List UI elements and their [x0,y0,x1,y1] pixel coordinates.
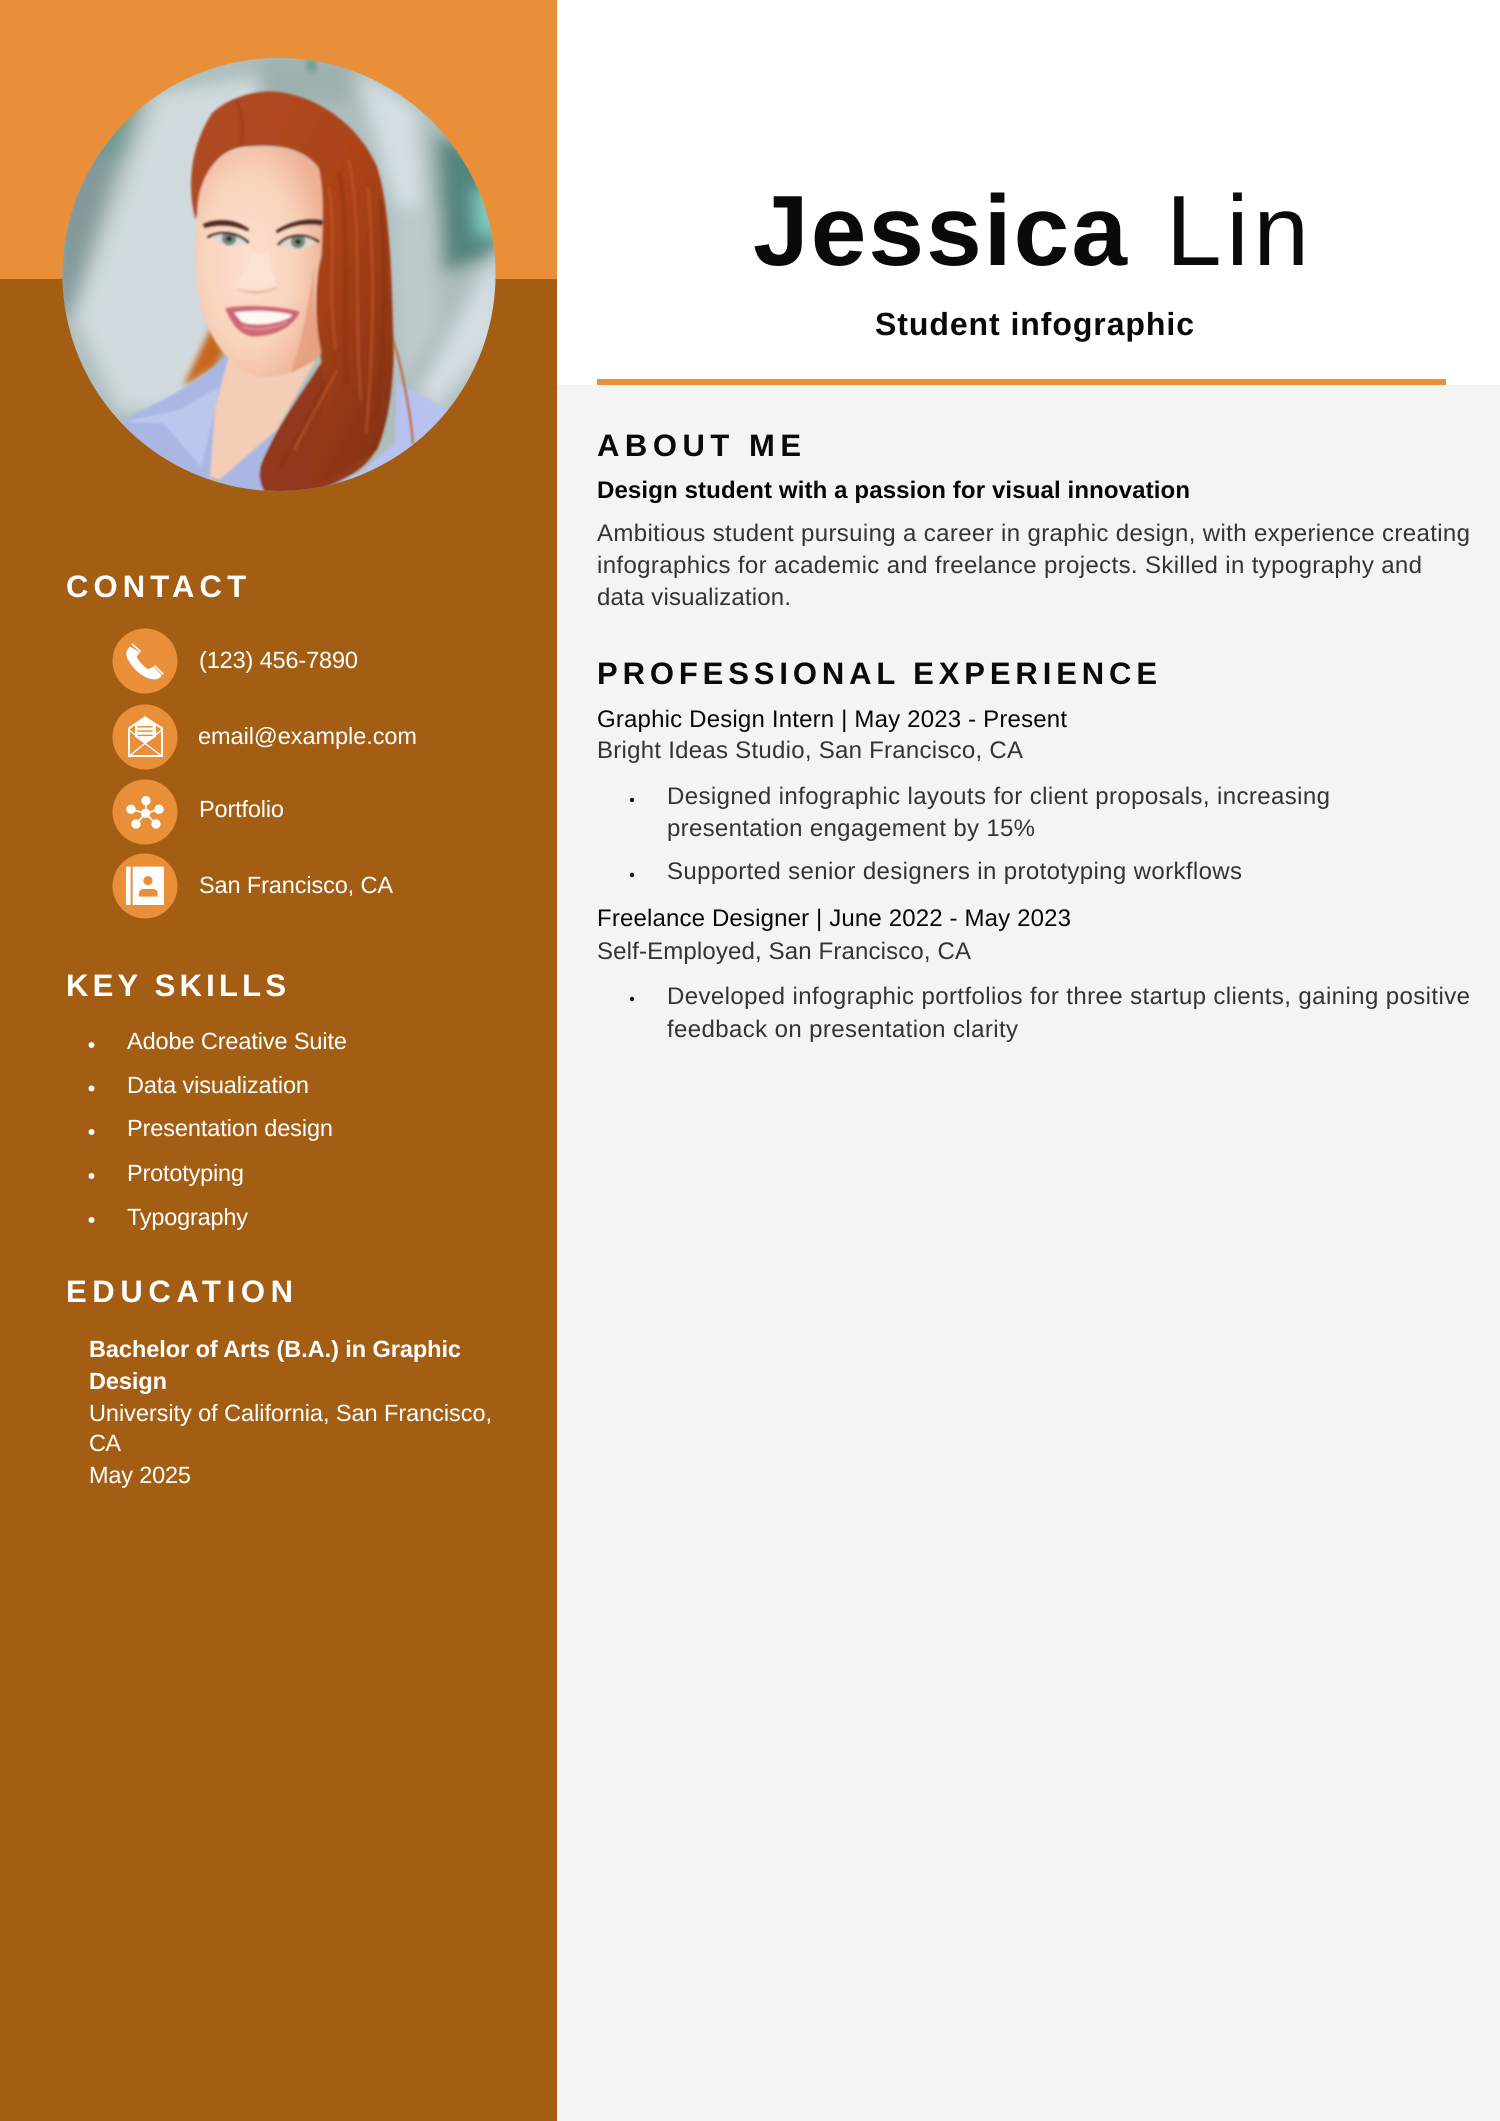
heading: professional experience: PROFESSIONAL EXPERIENCE [597,656,1157,691]
portrait photo [54,55,506,497]
job 1: Graphic Design Intern | May 2023 - Present [597,706,1067,733]
degree details: May 2025 [89,1462,191,1488]
about me tagline: Design student with a passion for visual innovation [597,477,1190,504]
panel: page background [557,0,1500,2121]
heading: about me: ABOUT ME [597,428,801,463]
job 1: Supported senior designers in prototyping workflows [667,858,1242,885]
heading: contact: CONTACT [66,569,246,604]
job 1: presentation engagement by 15% [667,815,1035,842]
contact: location: San Francisco, CA [199,872,393,898]
degree details: Bachelor of Arts (B.A.) in Graphic [89,1336,461,1362]
subtitle: Student infographic [875,306,1194,342]
skills list: Presentation design [127,1115,333,1141]
about me paragraph [597,520,1470,611]
contact: portfolio [112,780,284,844]
job 2: feedback on presentation clarity [667,1016,1018,1043]
job 2: Freelance Designer | June 2022 - May 2023 [597,905,1071,932]
contact: email [112,704,417,770]
panel: professional experience [597,656,1470,1043]
job 2 [597,905,1470,1043]
icon: phone [126,644,163,679]
degree details [89,1336,492,1488]
contact: phone [112,628,358,694]
name title [753,175,1309,287]
about me paragraph: infographics for academic and freelance projects. Skilled in typography and [597,552,1422,579]
name title: Lin [1166,175,1309,287]
header divider [597,379,1446,385]
degree details: University of California, San Francisco, [89,1400,492,1426]
panel: education [66,1274,492,1488]
about me paragraph: Ambitious student pursuing a career in graphic design, with experience creating [597,520,1470,547]
job 2: Self-Employed, San Francisco, CA [597,938,971,965]
panel: left sidebar [0,0,557,2121]
panel: contact [66,569,417,918]
job 1 [597,706,1330,885]
skills list: Adobe Creative Suite [127,1028,347,1054]
heading: education: EDUCATION [66,1274,293,1309]
degree details: CA [89,1430,121,1456]
skills list: Prototyping [127,1160,244,1186]
contact: portfolio: Portfolio [199,796,284,822]
panel: key skills [66,968,347,1230]
heading: key skills: KEY SKILLS [66,968,286,1003]
job 1: Bright Ideas Studio, San Francisco, CA [597,737,1023,764]
contact: phone: (123) 456-7890 [199,647,358,673]
panel: about me [597,428,1470,611]
degree details: Design [89,1368,167,1394]
name title: Jessica [753,175,1128,287]
contact: location [112,854,393,918]
contact: email: email@example.com [198,723,417,749]
icon: network [126,796,164,829]
job 2: Developed infographic portfolios for three startup clients, gaining positive [667,983,1470,1010]
skills list [88,1028,347,1230]
about me paragraph: data visualization. [597,584,791,611]
skills list: Typography [127,1204,248,1230]
icon: envelope [129,717,162,756]
icon: address book [126,867,164,905]
job 1: Designed infographic layouts for client proposals, increasing [667,783,1330,810]
skills list: Data visualization [127,1072,309,1098]
